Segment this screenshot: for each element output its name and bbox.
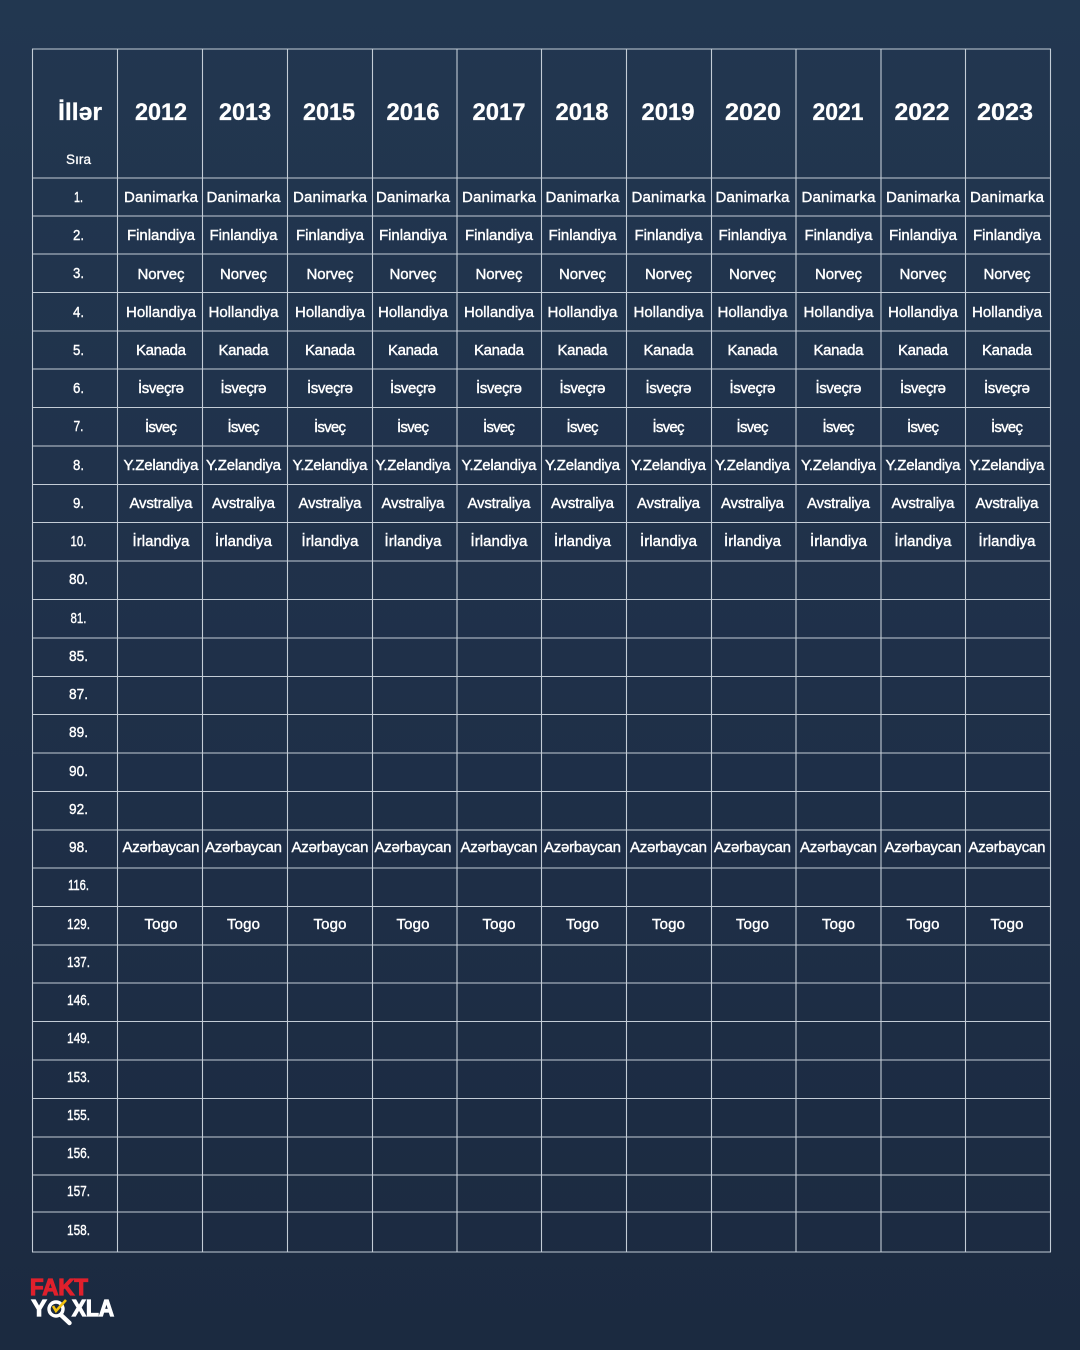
row 2: Finlandiya: Finlandiya (634, 227, 703, 244)
row 129: Togo: Togo (822, 916, 855, 933)
row 10: İrlandiya: İrlandiya (470, 532, 528, 550)
year 2017: 2017 (472, 99, 526, 126)
row 3: Norveç: Norveç (476, 266, 523, 283)
row 3: Norveç: Norveç (984, 266, 1031, 283)
row 98: Azərbaycan: Azərbaycan (630, 839, 707, 856)
row 2: Finlandiya: Finlandiya (804, 227, 873, 244)
rank column labels: 158. (67, 1222, 90, 1239)
row 4: Hollandiya: Hollandiya (378, 304, 449, 321)
row 1: Danimarka: Danimarka (124, 189, 199, 206)
rank column labels: 153. (67, 1069, 90, 1086)
row 7: İsveç: İsveç (991, 418, 1024, 436)
row 5: Kanada (136, 342, 1033, 359)
row 10: İrlandiya: İrlandiya (302, 532, 359, 550)
row 7: İsveç: İsveç (397, 418, 430, 436)
year 2012: 2012 (135, 99, 187, 126)
row 3: Norveç: Norveç (220, 266, 268, 283)
row 2: Finlandiya: Finlandiya (127, 227, 196, 244)
row 6: İsveçrə: İsveçrə (390, 379, 436, 397)
row 1: Danimarka: Danimarka (970, 189, 1045, 206)
row 5: Kanada: Kanada (644, 342, 694, 359)
rank column labels: 9. (73, 495, 84, 512)
row 7: İsveç: İsveç (314, 418, 346, 436)
year 2019: 2019 (642, 99, 694, 126)
row 129: Togo: Togo (482, 916, 516, 933)
row 4: Hollandiya: Hollandiya (718, 304, 788, 321)
row 129: Togo: Togo (906, 916, 940, 933)
row 9: Avstraliya: Avstraliya (212, 495, 276, 512)
year 2018: 2018 (556, 99, 608, 126)
row 9: Avstraliya: Avstraliya (637, 495, 701, 512)
row 10: İrlandiya: İrlandiya (132, 532, 190, 550)
row 129: Togo: Togo (566, 916, 599, 933)
heading: İllər: İllər (58, 99, 102, 126)
row 129: Togo: Togo (736, 916, 769, 933)
row 98: Azərbaycan: Azərbaycan (292, 839, 368, 856)
rank column labels: 149. (67, 1030, 90, 1047)
row 6: İsveçrə: İsveçrə (476, 379, 522, 397)
row 2: Finlandiya (127, 227, 1042, 244)
row 8: Y.Zelandiya: Y.Zelandiya (206, 457, 282, 474)
row 8: Y.Zelandiya (124, 457, 1045, 474)
row 9: Avstraliya: Avstraliya (130, 495, 193, 512)
row 4: Hollandiya: Hollandiya (888, 304, 959, 321)
rank column labels: 98. (69, 839, 88, 856)
rank column labels: 146. (67, 992, 90, 1009)
row 98: Azərbaycan: Azərbaycan (122, 839, 200, 856)
row 98: Azərbaycan: Azərbaycan (205, 839, 282, 856)
row 8: Y.Zelandiya: Y.Zelandiya (631, 457, 707, 474)
row 10: İrlandiya: İrlandiya (978, 532, 1036, 550)
rank column labels: 87. (69, 686, 88, 703)
row 9: Avstraliya: Avstraliya (298, 495, 362, 512)
rank column labels: 90. (69, 763, 88, 780)
row 4: Hollandiya: Hollandiya (208, 304, 279, 321)
row 6: İsveçrə: İsveçrə (138, 379, 184, 397)
row 98: Azərbaycan: Azərbaycan (884, 839, 962, 856)
year 2015: 2015 (303, 99, 355, 126)
row 7: İsveç: İsveç (822, 418, 855, 436)
row 1: Danimarka: Danimarka (293, 189, 368, 206)
row 10: İrlandiya: İrlandiya (215, 532, 273, 550)
row 2: Finlandiya: Finlandiya (296, 227, 365, 244)
rank column labels: 4. (73, 304, 84, 321)
row 9: Avstraliya: Avstraliya (892, 495, 955, 512)
row 9: Avstraliya: Avstraliya (807, 495, 871, 512)
rank column labels: 116. (68, 877, 89, 894)
row 1: Danimarka: Danimarka (462, 189, 537, 206)
rank column labels: 129. (67, 916, 90, 933)
row 5: Kanada: Kanada (728, 342, 778, 359)
row 4: Hollandiya: Hollandiya (126, 304, 197, 321)
row 2: Finlandiya: Finlandiya (210, 227, 278, 244)
label: Sıra: Sıra (66, 152, 91, 167)
row 1: Danimarka: Danimarka (802, 189, 876, 206)
row 8: Y.Zelandiya: Y.Zelandiya (886, 457, 961, 474)
rank column labels: 137. (67, 954, 90, 971)
row 5: Kanada: Kanada (474, 342, 525, 359)
row 6: İsveçrə: İsveçrə (307, 379, 353, 397)
row 4: Hollandiya: Hollandiya (634, 304, 704, 321)
rank column labels (67, 189, 90, 1239)
row 6: İsveçrə (138, 379, 1030, 397)
row 129: Togo: Togo (144, 916, 178, 933)
row 5: Kanada: Kanada (898, 342, 949, 359)
row 7: İsveç (145, 418, 1024, 436)
row 7: İsveç: İsveç (483, 418, 516, 436)
year 2020: 2020 (725, 99, 781, 126)
row 10: İrlandiya: İrlandiya (554, 532, 612, 550)
row 129: Togo: Togo (314, 916, 346, 933)
row 8: Y.Zelandiya: Y.Zelandiya (462, 457, 537, 474)
row 2: Finlandiya: Finlandiya (379, 227, 448, 244)
year 2023: 2023 (977, 99, 1033, 126)
row 7: İsveç: İsveç (652, 418, 685, 436)
row 1: Danimarka (124, 189, 1045, 206)
row 6: İsveçrə: İsveçrə (900, 379, 946, 397)
row 5: Kanada: Kanada (305, 342, 356, 359)
rank column labels: 92. (69, 801, 88, 818)
rank column labels: 80. (69, 571, 88, 588)
row 1: Danimarka: Danimarka (206, 189, 281, 206)
row 3: Norveç: Norveç (306, 266, 354, 283)
row 8: Y.Zelandiya: Y.Zelandiya (970, 457, 1045, 474)
row 9: Avstraliya: Avstraliya (382, 495, 445, 512)
row 1: Danimarka: Danimarka (546, 189, 620, 206)
row 98: Azərbaycan: Azərbaycan (968, 839, 1046, 856)
row 98: Azərbaycan: Azərbaycan (544, 839, 621, 856)
row 4: Hollandiya: Hollandiya (295, 304, 366, 321)
row 2: Finlandiya: Finlandiya (889, 227, 958, 244)
row 129: Togo: Togo (652, 916, 685, 933)
row 129: Togo: Togo (990, 916, 1024, 933)
row 8: Y.Zelandiya: Y.Zelandiya (715, 457, 791, 474)
row 129: Togo (144, 916, 1024, 933)
row 129: Togo: Togo (396, 916, 430, 933)
row 98: Azərbaycan: Azərbaycan (800, 839, 877, 856)
rank column labels: 85. (69, 648, 88, 665)
row 9: Avstraliya: Avstraliya (551, 495, 615, 512)
row 5: Kanada: Kanada (136, 342, 187, 359)
rank column labels: 155. (67, 1107, 90, 1124)
row 9: Avstraliya: Avstraliya (721, 495, 785, 512)
row 98: Azərbaycan: Azərbaycan (714, 839, 791, 856)
row 7: İsveç: İsveç (907, 418, 940, 436)
row 8: Y.Zelandiya: Y.Zelandiya (292, 457, 368, 474)
rank column labels: 157. (67, 1183, 90, 1200)
row 2: Finlandiya: Finlandiya (548, 227, 617, 244)
row 6: İsveçrə: İsveçrə (816, 379, 862, 397)
row 1: Danimarka: Danimarka (886, 189, 961, 206)
row 3: Norveç (138, 266, 1031, 283)
header row: years (58, 99, 1033, 167)
row 5: Kanada: Kanada (218, 342, 269, 359)
logo word: FAKT: FAKT (30, 1274, 88, 1300)
row 2: Finlandiya: Finlandiya (465, 227, 534, 244)
row 10: İrlandiya: İrlandiya (894, 532, 952, 550)
row 9: Avstraliya (130, 495, 1039, 512)
row 5: Kanada: Kanada (982, 342, 1033, 359)
row 6: İsveçrə: İsveçrə (646, 379, 692, 397)
rank column labels: 7. (74, 418, 84, 435)
row 9: Avstraliya: Avstraliya (976, 495, 1039, 512)
row 4: Hollandiya: Hollandiya (548, 304, 618, 321)
row 129: Togo: Togo (227, 916, 260, 933)
logo letters: XLA: XLA (72, 1295, 114, 1321)
logo letter: Y: Y (31, 1295, 47, 1321)
row 3: Norveç: Norveç (815, 266, 862, 283)
row 5: Kanada: Kanada (558, 342, 608, 359)
row 3: Norveç: Norveç (645, 266, 692, 283)
row 1: Danimarka: Danimarka (376, 189, 451, 206)
row 3: Norveç: Norveç (138, 266, 185, 283)
row 2: Finlandiya: Finlandiya (973, 227, 1042, 244)
row 10: İrlandiya (132, 532, 1036, 550)
row 6: İsveçrə: İsveçrə (560, 379, 606, 397)
row 6: İsveçrə: İsveçrə (220, 379, 266, 397)
row 10: İrlandiya: İrlandiya (384, 532, 442, 550)
row 10: İrlandiya: İrlandiya (810, 532, 868, 550)
rank column labels: 6. (73, 380, 84, 397)
rank column labels: 81. (70, 610, 86, 627)
row 3: Norveç: Norveç (559, 266, 606, 283)
row 98: Azərbaycan: Azərbaycan (460, 839, 538, 856)
row 4: Hollandiya: Hollandiya (804, 304, 874, 321)
row 4: Hollandiya: Hollandiya (972, 304, 1043, 321)
rank column labels: 8. (73, 457, 84, 474)
row 5: Kanada: Kanada (388, 342, 439, 359)
row 3: Norveç: Norveç (900, 266, 947, 283)
row 10: İrlandiya: İrlandiya (640, 532, 698, 550)
row 9: Avstraliya: Avstraliya (468, 495, 531, 512)
year 2016: 2016 (386, 99, 440, 126)
row 8: Y.Zelandiya: Y.Zelandiya (124, 457, 199, 474)
row 1: Danimarka: Danimarka (632, 189, 706, 206)
row 5: Kanada: Kanada (814, 342, 864, 359)
icon: magnifier with check (49, 1300, 70, 1323)
row 98: Azərbaycan (122, 839, 1046, 856)
rank column labels: 10. (70, 533, 86, 550)
rank column labels: 89. (69, 724, 88, 741)
logo: Fakt Yoxla (30, 1274, 114, 1323)
row 8: Y.Zelandiya: Y.Zelandiya (376, 457, 451, 474)
row 1: Danimarka: Danimarka (716, 189, 790, 206)
row 7: İsveç: İsveç (736, 418, 769, 436)
row 7: İsveç: İsveç (566, 418, 599, 436)
rank column labels: 5. (73, 342, 84, 359)
row 4: Hollandiya (126, 304, 1043, 321)
row 8: Y.Zelandiya: Y.Zelandiya (801, 457, 877, 474)
rank column labels: 2. (73, 227, 84, 244)
row 3: Norveç: Norveç (390, 266, 437, 283)
row 4: Hollandiya: Hollandiya (464, 304, 535, 321)
row 3: Norveç: Norveç (729, 266, 776, 283)
row 6: İsveçrə: İsveçrə (984, 379, 1030, 397)
row 98: Azərbaycan: Azərbaycan (374, 839, 452, 856)
row 10: İrlandiya: İrlandiya (724, 532, 782, 550)
year 2021: 2021 (812, 99, 864, 126)
year 2013: 2013 (219, 99, 271, 126)
rank column labels: 3. (73, 265, 84, 282)
rank column labels: 1. (74, 189, 83, 206)
row 6: İsveçrə: İsveçrə (730, 379, 776, 397)
year 2022: 2022 (894, 99, 950, 126)
rank column labels: 156. (67, 1145, 90, 1162)
row 2: Finlandiya: Finlandiya (718, 227, 787, 244)
row 8: Y.Zelandiya: Y.Zelandiya (545, 457, 621, 474)
row 7: İsveç: İsveç (228, 418, 260, 436)
row 7: İsveç: İsveç (145, 418, 178, 436)
